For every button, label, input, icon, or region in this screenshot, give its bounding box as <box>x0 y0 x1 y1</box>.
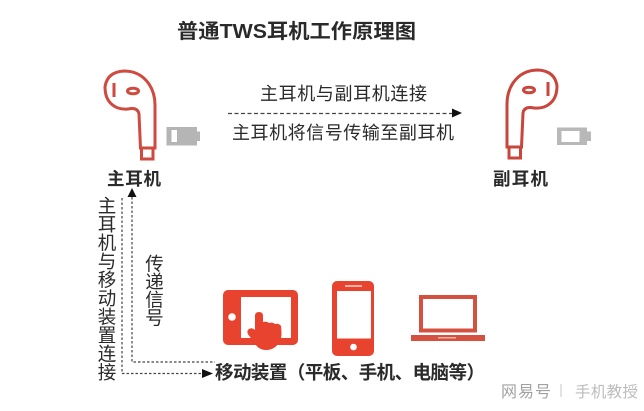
text: vertical signal transfer: 号 <box>145 308 164 328</box>
watermark: 网易号 <box>501 383 551 401</box>
icon: main earbud battery <box>166 127 200 146</box>
text: vertical signal transfer: 信 <box>145 290 164 310</box>
text: vertical signal transfer <box>145 254 164 328</box>
arrow: main to secondary earbud <box>228 108 462 118</box>
text: vertical device connection: 主 <box>98 196 116 216</box>
text: vertical device connection: 耳 <box>98 214 116 235</box>
arrow: connection to mobile device <box>122 198 213 378</box>
text: vertical signal transfer: 传 <box>145 254 164 274</box>
icon: secondary earbud <box>507 70 557 158</box>
label: main earbud: 主耳机 <box>107 169 162 189</box>
text: vertical device connection <box>98 196 117 383</box>
text: vertical signal transfer: 递 <box>145 272 164 292</box>
text: earbud connection: 主耳机与副耳机连接 <box>260 84 427 104</box>
text: vertical device connection: 动 <box>98 288 116 309</box>
text: vertical device connection: 移 <box>98 270 116 290</box>
icon: tablet with hand <box>223 290 298 350</box>
label: mobile devices: 移动装置（平板、手机、电脑等） <box>215 362 485 383</box>
watermark <box>501 383 638 401</box>
watermark: 手机教授 <box>575 383 638 401</box>
text: vertical device connection: 连 <box>98 344 116 364</box>
title: 普通TWS耳机工作原理图 <box>177 20 416 43</box>
text: vertical device connection: 装 <box>98 306 116 328</box>
text: vertical device connection: 机 <box>98 232 117 254</box>
arrow: signal to main earbud <box>128 188 215 362</box>
label: secondary earbud: 副耳机 <box>493 169 548 189</box>
text: vertical device connection: 与 <box>98 251 116 272</box>
text: vertical device connection: 置 <box>98 325 116 346</box>
text: signal transfer: 主耳机将信号传输至副耳机 <box>232 123 454 143</box>
icon: main earbud <box>105 71 155 159</box>
text: vertical device connection: 接 <box>98 362 116 383</box>
icon: secondary earbud battery <box>557 128 591 145</box>
icon: smartphone <box>332 281 374 356</box>
icon: laptop <box>411 297 485 341</box>
